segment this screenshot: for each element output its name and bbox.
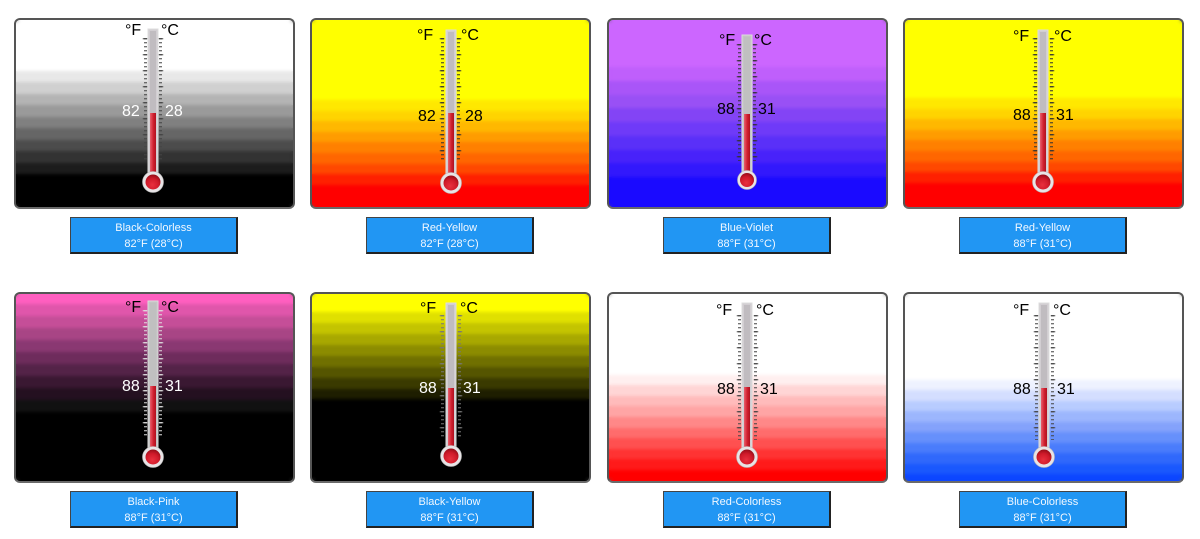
scale labels: °C — [754, 32, 772, 49]
label: Black-Pink: Black-Pink — [128, 496, 179, 508]
scale labels — [716, 302, 778, 398]
scale labels: °F — [417, 27, 433, 44]
thermometer — [142, 29, 164, 192]
scale labels: °F — [420, 300, 436, 317]
label: Black-Pink: 88°F (31°C) — [124, 512, 183, 524]
scale labels: °F — [125, 299, 141, 316]
scale labels: 31 — [1056, 107, 1074, 124]
scale labels: °C — [460, 300, 478, 317]
label: Black-Yellow: Black-Yellow — [419, 496, 480, 508]
scale labels: 82 — [122, 103, 140, 120]
scale labels: °C — [1053, 302, 1071, 319]
label: Blue-Violet — [663, 217, 831, 254]
thermometer — [736, 303, 758, 468]
panel: Blue-Violet 88F — [607, 18, 888, 209]
thermometer — [440, 30, 462, 194]
scale labels — [122, 299, 183, 395]
thermometer — [440, 303, 462, 466]
scale labels: 88 — [1013, 107, 1031, 124]
thermometer — [142, 301, 164, 468]
scale labels: °C — [161, 22, 179, 39]
label: Red-Yellow 88F — [959, 217, 1127, 254]
scale labels: 88 — [1013, 381, 1031, 398]
scale labels: 28 — [165, 103, 183, 120]
scale labels: °F — [1013, 302, 1029, 319]
thermometer — [1032, 30, 1054, 192]
scale labels: °C — [756, 302, 774, 319]
label: Black-Colorless: Black-Colorless — [115, 222, 192, 234]
panel: Red-Yellow 88F — [903, 18, 1184, 209]
scale labels: 31 — [165, 378, 183, 395]
panel: Red-Yellow 82F — [310, 18, 591, 209]
panel: Black-Colorless 82F — [14, 18, 295, 209]
label: Black-Colorless: 82°F (28°C) — [124, 238, 183, 250]
scale labels: °C — [461, 27, 479, 44]
scale labels: °C — [161, 299, 179, 316]
scale labels: 31 — [760, 381, 778, 398]
label: Red-Yellow 82F: 82°F (28°C) — [420, 238, 479, 250]
label: Red-Colorless: 88°F (31°C) — [717, 512, 776, 524]
scale labels — [417, 27, 483, 125]
label: Red-Yellow 82F — [366, 217, 534, 254]
scale labels: 31 — [758, 101, 776, 118]
scale labels: 88 — [122, 378, 140, 395]
label: Red-Yellow 82F: Red-Yellow — [422, 222, 477, 234]
panel: Black-Pink 88F — [14, 292, 295, 483]
scale labels: 88 — [419, 380, 437, 397]
scale labels: 88 — [717, 101, 735, 118]
label: Blue-Colorless — [959, 491, 1127, 528]
scale labels — [717, 32, 776, 118]
panel: Blue-Colorless 88F — [903, 292, 1184, 483]
label: Black-Yellow — [366, 491, 534, 528]
panel: Red-Colorless 88F — [607, 292, 888, 483]
scale labels: 31 — [1057, 381, 1075, 398]
label: Blue-Violet: Blue-Violet — [720, 222, 773, 234]
scale labels: 82 — [418, 108, 436, 125]
scale labels — [419, 300, 481, 397]
scale labels: °F — [1013, 28, 1029, 45]
scale labels: °F — [125, 22, 141, 39]
label: Red-Colorless — [663, 491, 831, 528]
label: Blue-Colorless: Blue-Colorless — [1007, 496, 1078, 508]
panel: Black-Yellow 88F — [310, 292, 591, 483]
scale labels: 28 — [465, 108, 483, 125]
scale labels: 88 — [717, 381, 735, 398]
label: Blue-Colorless: 88°F (31°C) — [1013, 512, 1072, 524]
label: Blue-Violet: 88°F (31°C) — [717, 238, 776, 250]
label: Black-Yellow: 88°F (31°C) — [420, 512, 479, 524]
label: Black-Pink — [70, 491, 238, 528]
label: Black-Colorless — [70, 217, 238, 254]
scale labels: °F — [716, 302, 732, 319]
thermometer — [738, 35, 756, 190]
label: Red-Colorless: Red-Colorless — [712, 496, 781, 508]
scale labels — [1013, 28, 1074, 124]
label: Red-Yellow 88F: 88°F (31°C) — [1013, 238, 1072, 250]
scale labels — [122, 22, 183, 120]
label: Red-Yellow 88F: Red-Yellow — [1015, 222, 1070, 234]
thermometer — [1034, 303, 1054, 468]
scale labels: °C — [1054, 28, 1072, 45]
scale labels: 31 — [463, 380, 481, 397]
scale labels — [1013, 302, 1075, 398]
scale labels: °F — [719, 32, 735, 49]
